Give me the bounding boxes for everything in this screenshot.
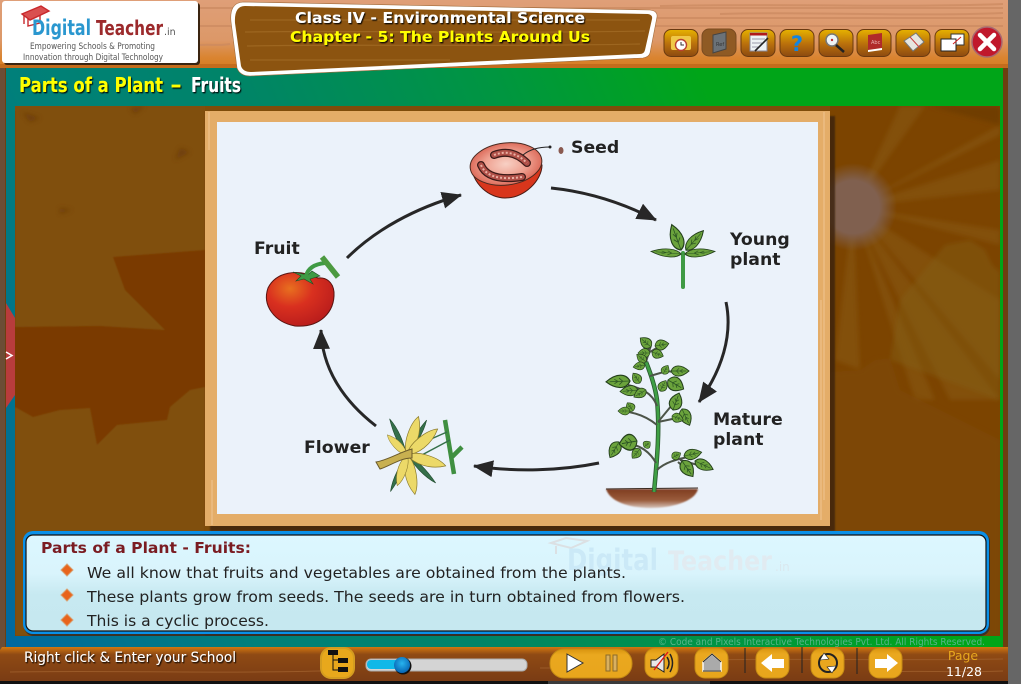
icon: reference book: Ref bbox=[716, 42, 724, 48]
copyright: © Code and Pixels Interactive Technologies Pvt. Ltd. All Rights Reserved. bbox=[658, 637, 985, 648]
divider bbox=[801, 647, 803, 673]
label: seed: Seed bbox=[571, 138, 619, 158]
icon: forward arrow bbox=[869, 648, 902, 678]
icon: help bbox=[780, 30, 814, 56]
section title: Fruits bbox=[191, 73, 241, 97]
bullet 3: This is a cyclic process. bbox=[86, 612, 269, 630]
watermark: Teacher bbox=[668, 546, 773, 577]
label: young plant: plant bbox=[730, 250, 781, 270]
label: mature plant: Mature bbox=[713, 410, 783, 430]
watermark: .in bbox=[775, 560, 790, 574]
divider bbox=[744, 648, 746, 673]
icon: dictionary bbox=[857, 30, 891, 56]
icon: contents tree button bbox=[321, 648, 354, 678]
icon: graduation cap bbox=[22, 6, 49, 26]
logo panel bbox=[2, 1, 200, 65]
side tab bbox=[6, 303, 15, 408]
status text: Right click & Enter your School bbox=[24, 650, 236, 666]
watermark: Digital bbox=[567, 543, 658, 577]
icon: magnifier bbox=[819, 30, 853, 56]
icon: cut tomato bbox=[468, 139, 552, 198]
icon: notes bbox=[741, 30, 775, 56]
label: mature plant: plant bbox=[713, 430, 764, 450]
page number: 11/28 bbox=[946, 664, 982, 679]
play and pause controls bbox=[550, 649, 632, 678]
logo wordmark: Teacher bbox=[96, 16, 163, 40]
page slider bbox=[366, 657, 527, 674]
panel: wooden picture frame bbox=[205, 111, 835, 531]
watermark bbox=[551, 538, 790, 577]
bullet 2: These plants grow from seeds. The seeds are in turn obtained from flowers. bbox=[86, 588, 685, 606]
logo tagline: Empowering Schools & Promoting bbox=[30, 42, 155, 52]
banner title: Class IV - Environmental Science bbox=[295, 9, 585, 27]
icon: help: ? bbox=[791, 32, 803, 56]
logo wordmark bbox=[32, 16, 176, 40]
top wooden header bbox=[0, 0, 1008, 68]
icon: back arrow bbox=[756, 648, 789, 678]
bottom control bar bbox=[0, 647, 1008, 681]
icon: refresh bbox=[811, 648, 844, 678]
icon: home bbox=[695, 648, 728, 678]
panel: explanation text box bbox=[23, 531, 990, 636]
text box heading: Parts of a Plant - Fruits: bbox=[41, 539, 251, 557]
icon: mature plant bbox=[605, 334, 715, 508]
icon: reference book bbox=[702, 29, 736, 56]
icon: young plant bbox=[651, 223, 715, 287]
icon: open book bbox=[896, 30, 930, 56]
section title: Parts of a Plant bbox=[19, 73, 163, 97]
arrow: flower to fruit bbox=[321, 330, 376, 426]
logo tagline: Innovation through Digital Technology bbox=[23, 53, 163, 63]
icon: flower bbox=[376, 415, 462, 495]
divider bbox=[856, 648, 858, 674]
label: flower: Flower bbox=[304, 438, 370, 458]
toolbar icons bbox=[664, 27, 1002, 57]
arrow: fruit to seed bbox=[347, 195, 461, 258]
page number: Page bbox=[948, 648, 978, 663]
label: fruit: Fruit bbox=[254, 239, 300, 259]
icon: history folder bbox=[664, 30, 698, 56]
icon: tomato fruit bbox=[266, 257, 338, 326]
bullet 1: We all know that fruits and vegetables are obtained from the plants. bbox=[87, 564, 626, 582]
logo wordmark: Digital bbox=[32, 16, 91, 40]
icon: seed bbox=[558, 147, 564, 154]
label: young plant: Young bbox=[730, 230, 790, 250]
arrow: seed to young plant bbox=[551, 188, 656, 220]
banner chapter: Chapter - 5: The Plants Around Us bbox=[290, 28, 590, 46]
logo tagline bbox=[23, 42, 163, 63]
icon: dictionary: Abc bbox=[871, 40, 881, 46]
arrow: mature plant to flower bbox=[474, 463, 599, 470]
section title: - bbox=[170, 73, 182, 97]
icon: sound muted bbox=[645, 648, 678, 678]
page number bbox=[946, 648, 982, 679]
icon: window resize bbox=[935, 30, 969, 56]
icon: close bbox=[972, 27, 1002, 57]
life cycle diagram bbox=[254, 138, 790, 508]
logo wordmark: .in bbox=[164, 27, 176, 38]
arrow: young plant to mature plant bbox=[699, 302, 728, 402]
chapter banner bbox=[231, 2, 657, 76]
background photo: clouds and sun bbox=[15, 106, 1000, 636]
